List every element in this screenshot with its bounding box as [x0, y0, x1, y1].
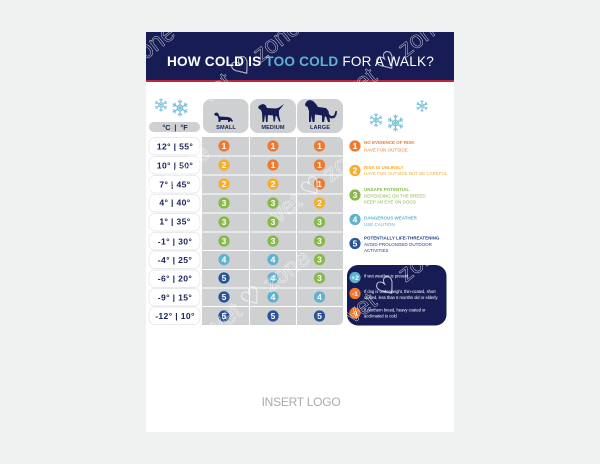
risk ratings: small dogs column: 3	[222, 236, 227, 246]
temperature row labels: -9° | 15°	[158, 292, 192, 302]
column header: large dog	[297, 99, 343, 133]
temperature unit header: °C | °F	[162, 123, 188, 132]
watermarks: vet ♡ zone	[340, 234, 450, 329]
legend: level 1: 1	[353, 141, 358, 151]
modifiers panel: coated, less than 6 months old or elderly	[364, 295, 438, 300]
risk ratings: large dogs column: 1	[317, 160, 322, 170]
temperature row labels: -6° | 20°	[158, 274, 192, 284]
risk ratings: large dogs column: 5	[317, 311, 322, 321]
risk ratings: small dogs column: 2	[222, 179, 227, 189]
risk ratings: large dogs column: 3	[317, 273, 322, 283]
temperature unit header	[149, 122, 200, 132]
column header: medium dog: MEDIUM	[261, 125, 285, 131]
column header: large dog: LARGE	[310, 125, 330, 131]
risk ratings: small dogs column: 1	[222, 141, 227, 151]
legend: level 3: UNSAFE POTENTIAL	[364, 187, 410, 192]
risk ratings: small dogs column: 3	[222, 217, 227, 227]
modifiers panel: acclimated to cold	[364, 314, 397, 318]
legend: level 4	[349, 214, 418, 227]
legend: level 1	[349, 140, 415, 152]
temperature row labels: 7° | 45°	[159, 180, 191, 190]
watermarks: vet ♡ zone	[70, 19, 180, 114]
title: HOW COLD IS TOO COLD FOR A WALK?	[167, 54, 434, 69]
legend: level 5: ACTIVITIES	[364, 248, 389, 253]
legend: level 5	[349, 236, 440, 253]
risk ratings: large dogs column: 1	[317, 141, 322, 151]
legend: level 4: 4	[353, 214, 358, 224]
risk ratings: large dogs column: 3	[317, 217, 322, 227]
legend: level 2	[349, 165, 448, 176]
legend: level 4: USE CAUTION	[364, 222, 395, 227]
watermarks: vet ♡ zone	[340, 9, 450, 104]
legend: level 1: NO EVIDENCE OF RISK	[364, 140, 415, 145]
legend: level 4: DANGEROUS WEATHER	[364, 216, 418, 221]
temperature row labels	[149, 138, 200, 324]
legend: level 5: 5	[353, 238, 358, 248]
risk ratings: large dogs column	[314, 140, 325, 322]
logo placeholder: INSERT LOGO	[262, 395, 340, 409]
temperature row labels: 10° | 50°	[157, 160, 193, 170]
risk ratings: large dogs column: 4	[317, 292, 322, 302]
watermarks: vet ♡ zone	[105, 139, 215, 234]
white poster panel	[146, 32, 454, 432]
temperature row labels: 4° | 40°	[159, 198, 191, 208]
modifiers panel: If wet weather is present	[364, 274, 409, 278]
column header: medium dog	[250, 99, 296, 133]
watermarks	[146, 32, 436, 325]
risk ratings: medium dogs column: 4	[271, 273, 276, 283]
legend: level 2: 2	[353, 166, 358, 176]
modifiers panel: +2	[351, 275, 359, 282]
risk ratings: large dogs column: 1	[317, 179, 322, 189]
risk ratings: medium dogs column: 4	[271, 292, 276, 302]
risk ratings: small dogs column: 5	[222, 273, 227, 283]
legend: level 5: POTENTIALLY LIFE-THREATENING	[364, 236, 440, 241]
risk grid background	[202, 137, 343, 325]
modifiers panel: If dog is underweight, thin-coated, short	[364, 289, 437, 294]
risk ratings: medium dogs column	[267, 140, 279, 322]
modifiers panel: -1	[352, 291, 358, 298]
risk ratings: small dogs column: 4	[222, 254, 227, 264]
temperature row labels: 12° | 55°	[157, 142, 193, 152]
risk ratings: medium dogs column: 4	[271, 254, 276, 264]
risk ratings: medium dogs column: 3	[271, 217, 276, 227]
temperature row labels: -12° | 10°	[155, 311, 195, 321]
snowflakes right	[370, 100, 427, 132]
legend: level 3: 3	[353, 190, 358, 200]
column header: small dog	[203, 99, 248, 133]
legend: level 1: HAVE FUN OUTSIDE	[364, 148, 408, 152]
temperature row labels: -4° | 25°	[158, 255, 192, 265]
risk ratings: small dogs column	[218, 140, 230, 322]
risk ratings: small dogs column: 5	[222, 292, 227, 302]
risk ratings: small dogs column: 3	[222, 198, 227, 208]
risk ratings: large dogs column: 2	[317, 198, 322, 208]
legend: level 5: AVOID PROLONGED OUTDOOR	[364, 242, 433, 247]
risk ratings: medium dogs column: 5	[271, 311, 276, 321]
watermarks: vet ♡ zone	[205, 244, 315, 339]
legend: level 2: HAVE FUN OUTSIDE BUT BE CAREFUL	[364, 171, 448, 176]
modifiers panel: -1	[352, 310, 358, 318]
risk ratings: medium dogs column: 1	[271, 160, 276, 170]
column header: small dog: SMALL	[216, 125, 236, 131]
risk ratings: medium dogs column: 2	[271, 179, 276, 189]
risk ratings: medium dogs column: 1	[271, 141, 276, 151]
temperature row labels: -1° | 30°	[158, 236, 192, 246]
modifiers panel	[347, 265, 446, 326]
risk ratings: large dogs column: 3	[317, 236, 322, 246]
risk ratings: small dogs column: 5	[222, 311, 227, 321]
risk ratings: medium dogs column: 3	[271, 236, 276, 246]
risk ratings: large dogs column: 3	[317, 254, 322, 264]
snowflakes left	[155, 98, 187, 116]
temperature row labels: 1° | 35°	[159, 216, 191, 226]
watermarks: vet ♡ zone	[195, 14, 305, 109]
legend: level 3: KEEP AN EYE ON DOGS	[364, 200, 416, 205]
modifiers panel: If northern breed, heavy coated or	[364, 308, 426, 312]
risk ratings: medium dogs column: 3	[271, 198, 276, 208]
legend: level 3	[349, 187, 426, 205]
legend: level 3: DEPENDING ON THE BREED	[364, 194, 426, 198]
header banner	[146, 32, 454, 82]
risk ratings: small dogs column: 2	[222, 160, 227, 170]
legend: level 2: RISK IS UNLIKELY	[364, 165, 404, 170]
watermarks: vet ♡ zone	[265, 134, 375, 229]
